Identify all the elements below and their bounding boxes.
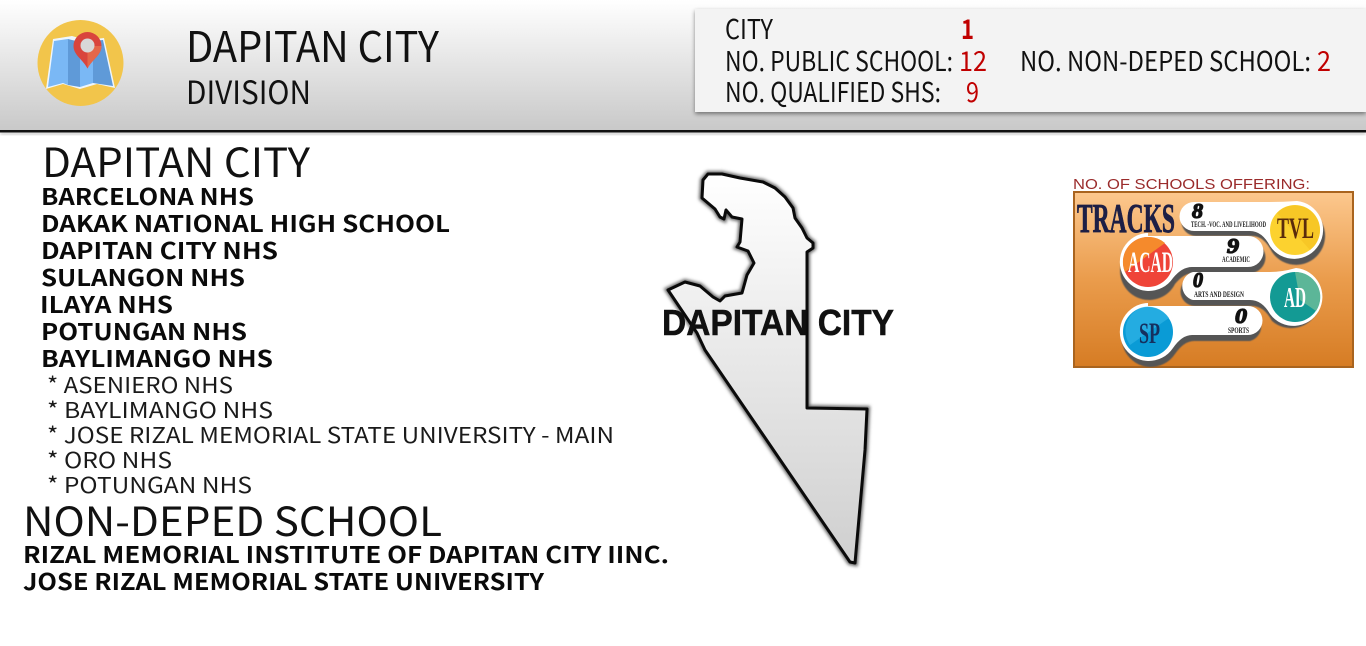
list: public schools: DAPITAN CITY NHS bbox=[41, 232, 278, 266]
list: qualified SHS: * JOSE RIZAL MEMORIAL STATE UNIVERSITY - MAIN bbox=[47, 418, 614, 450]
track: TVL: 8 bbox=[1192, 199, 1204, 223]
list: public schools bbox=[40, 178, 450, 374]
panel: school counts: CITY bbox=[725, 8, 774, 47]
list: public schools: BAYLIMANGO NHS bbox=[41, 340, 273, 374]
list: non-DepEd schools bbox=[23, 536, 669, 597]
map: Dapitan City bbox=[662, 174, 894, 563]
title bbox=[186, 14, 440, 114]
track: ACAD: 9 bbox=[1227, 234, 1240, 258]
track: AD: 0 bbox=[1193, 268, 1203, 292]
list: public schools: ILAYA NHS bbox=[40, 286, 173, 320]
list: public schools: BARCELONA NHS bbox=[41, 178, 254, 212]
heading: Dapitan City schools: DAPITAN CITY bbox=[42, 131, 311, 189]
list: non-DepEd schools: JOSE RIZAL MEMORIAL STATE UNIVERSITY bbox=[23, 563, 545, 597]
list: public schools: DAKAK NATIONAL HIGH SCHOOL bbox=[41, 205, 450, 239]
list: public schools: SULANGON NHS bbox=[41, 259, 245, 293]
panel: school counts: 9 bbox=[966, 71, 979, 110]
list: qualified SHS: * ASENIERO NHS bbox=[47, 368, 233, 400]
track: TVL: TVL bbox=[1277, 212, 1314, 245]
panel: school counts bbox=[695, 8, 1366, 112]
panel: school counts: NO. QUALIFIED SHS: bbox=[725, 71, 941, 110]
heading: schools offering: NO. OF SCHOOLS OFFERING: bbox=[1073, 176, 1310, 193]
track: SP: SP bbox=[1139, 317, 1160, 350]
panel: school counts: NO. PUBLIC SCHOOL: bbox=[725, 40, 953, 79]
list: qualified SHS: * POTUNGAN NHS bbox=[47, 468, 252, 500]
track: ACAD: ACADEMIC bbox=[1222, 255, 1250, 264]
list: qualified SHS: * ORO NHS bbox=[47, 443, 172, 475]
panel: school counts: 1 bbox=[961, 8, 974, 47]
panel: school counts: 2 bbox=[1317, 40, 1331, 79]
map label: DAPITAN CITY bbox=[662, 302, 894, 343]
track: AD bbox=[1180, 268, 1322, 328]
panel: tracks bbox=[1074, 192, 1353, 367]
track: SP: SPORTS bbox=[1228, 326, 1249, 335]
heading: non-DepEd school: NON-DEPED SCHOOL bbox=[23, 490, 442, 548]
title: DAPITAN CITY bbox=[186, 14, 440, 75]
panel: school counts: NO. NON-DEPED SCHOOL: bbox=[1020, 40, 1311, 79]
track: AD: ARTS AND DESIGN bbox=[1194, 290, 1244, 299]
track: TVL bbox=[1180, 199, 1325, 265]
list: public schools: POTUNGAN NHS bbox=[41, 313, 247, 347]
icon: map pin bbox=[38, 20, 124, 106]
list: non-DepEd schools: RIZAL MEMORIAL INSTITUTE OF DAPITAN CITY IINC. bbox=[23, 536, 669, 570]
track: AD: AD bbox=[1284, 282, 1306, 314]
track: SP bbox=[1120, 303, 1262, 367]
title: DIVISION bbox=[186, 68, 311, 114]
track: SP: 0 bbox=[1235, 304, 1248, 328]
list: qualified SHS bbox=[47, 368, 614, 500]
track: ACAD bbox=[1120, 233, 1265, 300]
header band bbox=[0, 0, 1366, 135]
track: ACAD: ACAD bbox=[1128, 246, 1173, 279]
list: qualified SHS: * BAYLIMANGO NHS bbox=[47, 393, 273, 425]
tracks title: TRACKS bbox=[1077, 195, 1175, 241]
panel: school counts: 12 bbox=[959, 40, 987, 79]
track: TVL: TECH. -VOC. AND LIVELIHOOD bbox=[1191, 220, 1266, 229]
